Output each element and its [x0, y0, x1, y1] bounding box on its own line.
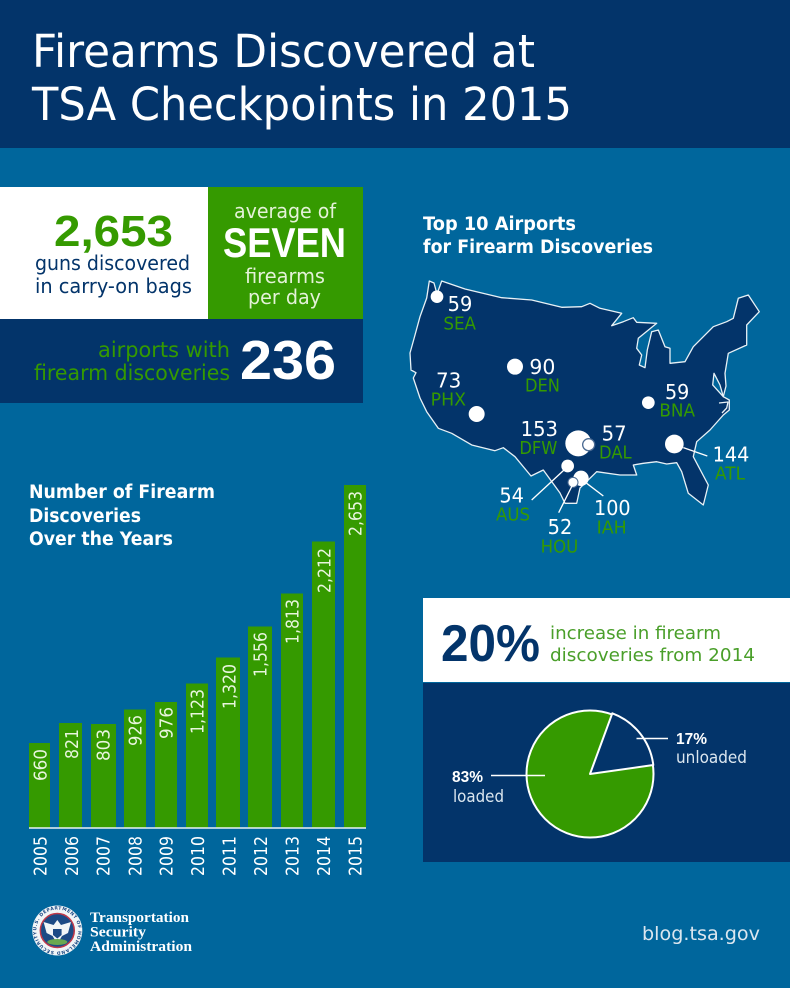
- bar values: 1,320: [220, 664, 240, 709]
- title: Firearms Discovered at: [32, 25, 535, 78]
- panel: average of seven per day: average of: [234, 199, 337, 223]
- airport: BNA: 59: [665, 380, 689, 404]
- chart heading: Discoveries: [29, 506, 141, 527]
- airport: AUS: [496, 460, 574, 526]
- airport: BNA: [642, 380, 695, 422]
- panel: average of seven per day: per day: [248, 285, 321, 309]
- airport: SEA: SEA: [443, 314, 476, 334]
- year labels: 2010: [188, 836, 209, 876]
- airport: DEN: 90: [529, 355, 555, 379]
- year labels: 2015: [346, 836, 366, 876]
- bar values: [30, 491, 366, 781]
- label: unloaded: [636, 731, 747, 767]
- airport: DAL: [583, 422, 632, 464]
- airport: AUS: 54: [499, 484, 524, 508]
- airport: DEN: [507, 355, 560, 397]
- pie chart: [526, 710, 654, 838]
- panel: 20% increase: [423, 598, 790, 682]
- airport: ATL: [665, 435, 749, 484]
- panel: airports with discoveries: [0, 319, 363, 403]
- label: unloaded: 17%: [676, 731, 707, 748]
- panel: loaded vs unloaded: [423, 683, 790, 862]
- panel: 20% increase: increase in firearm: [550, 623, 721, 644]
- year labels: 2008: [126, 836, 146, 876]
- US outline: [410, 281, 759, 505]
- airport: DFW: 153: [521, 417, 558, 441]
- title: [31, 25, 572, 131]
- label: loaded: loaded: [453, 787, 504, 806]
- bar values: 2,212: [314, 548, 336, 593]
- panel: average of seven per day: [208, 187, 363, 319]
- airport: HOU: 52: [548, 515, 572, 539]
- year labels: 2013: [282, 836, 304, 876]
- label: unloaded: unloaded: [676, 748, 747, 767]
- year labels: [30, 836, 366, 876]
- bar values: 1,123: [188, 689, 208, 734]
- bars: [29, 485, 366, 828]
- bar values: 2,653: [346, 491, 366, 536]
- airport: SEA: [431, 290, 476, 334]
- bar chart: discoveries by year: [29, 485, 366, 876]
- year labels: 2014: [314, 836, 335, 876]
- year labels: 2009: [156, 836, 178, 876]
- year labels: 2007: [94, 836, 114, 876]
- panel: airports with discoveries: airports with: [98, 338, 230, 362]
- airport: HOU: [541, 477, 578, 558]
- bar values: 821: [62, 729, 83, 759]
- map heading: [423, 214, 653, 258]
- airport: AUS: AUS: [496, 506, 530, 526]
- map heading: Top 10 Airports: [423, 214, 576, 235]
- agency name: Administration: [90, 939, 193, 955]
- airport: PHX: 73: [436, 369, 461, 393]
- year labels: 2006: [62, 836, 83, 876]
- year labels: 2012: [251, 836, 272, 876]
- chart heading: Over the Years: [29, 529, 173, 550]
- chart heading: [29, 482, 215, 550]
- panel: airports with discoveries: 236: [240, 329, 336, 391]
- agency name: Transportation: [90, 910, 190, 926]
- airport: BNA: BNA: [659, 402, 695, 422]
- panel: 20% increase: 20%: [441, 615, 540, 673]
- bar values: 1,813: [282, 599, 304, 644]
- website: blog.tsa.gov: [642, 923, 760, 945]
- year labels: 2011: [220, 836, 240, 876]
- airport: IAH: IAH: [597, 518, 627, 538]
- year labels: 2005: [30, 836, 52, 876]
- airport: PHX: [431, 369, 485, 422]
- airport: IAH: [573, 471, 631, 538]
- bar values: 803: [94, 729, 114, 761]
- map: top 10 airports: [410, 281, 759, 558]
- bar values: 976: [156, 707, 178, 739]
- map heading: for Firearm Discoveries: [423, 237, 653, 258]
- panel: average of seven per day: SEVEN: [223, 219, 346, 266]
- airport: DFW: DFW: [519, 439, 557, 459]
- bar values: 660: [30, 749, 52, 781]
- airport: IAH: 100: [594, 496, 631, 520]
- panel: guns discovered: guns discovered: [35, 251, 190, 275]
- panel: 20% increase: discoveries from 2014: [550, 645, 755, 666]
- label: loaded: [452, 769, 545, 806]
- airport: DAL: DAL: [599, 444, 632, 464]
- agency name: Security: [90, 924, 147, 940]
- bar values: 926: [126, 715, 146, 746]
- panel: guns discovered: in carry-on bags: [35, 274, 192, 298]
- title: TSA Checkpoints in 2015: [31, 78, 572, 131]
- panel: guns discovered: 2,653: [54, 207, 173, 256]
- panel: guns discovered: [0, 187, 208, 319]
- agency name: [90, 910, 193, 955]
- airport: HOU: HOU: [541, 538, 578, 558]
- bar values: 1,556: [250, 632, 272, 677]
- icon: DHS seal: U.S. DEPARTMENT OF HOMELAND SECURITY: [33, 906, 82, 955]
- airport: PHX: PHX: [431, 390, 466, 410]
- label: loaded: 83%: [452, 769, 483, 786]
- chart heading: Number of Firearm: [29, 482, 215, 503]
- airport: DFW: [519, 417, 591, 459]
- panel: airports with discoveries: firearm discoveries: [34, 361, 230, 385]
- airport: DEN: DEN: [525, 377, 560, 397]
- airport: DAL: 57: [602, 422, 627, 446]
- airport: ATL: ATL: [715, 464, 745, 484]
- title banner: [0, 0, 790, 148]
- panel: average of seven per day: firearms: [245, 264, 325, 288]
- airport: SEA: 59: [448, 292, 472, 316]
- airport: ATL: 144: [713, 443, 749, 467]
